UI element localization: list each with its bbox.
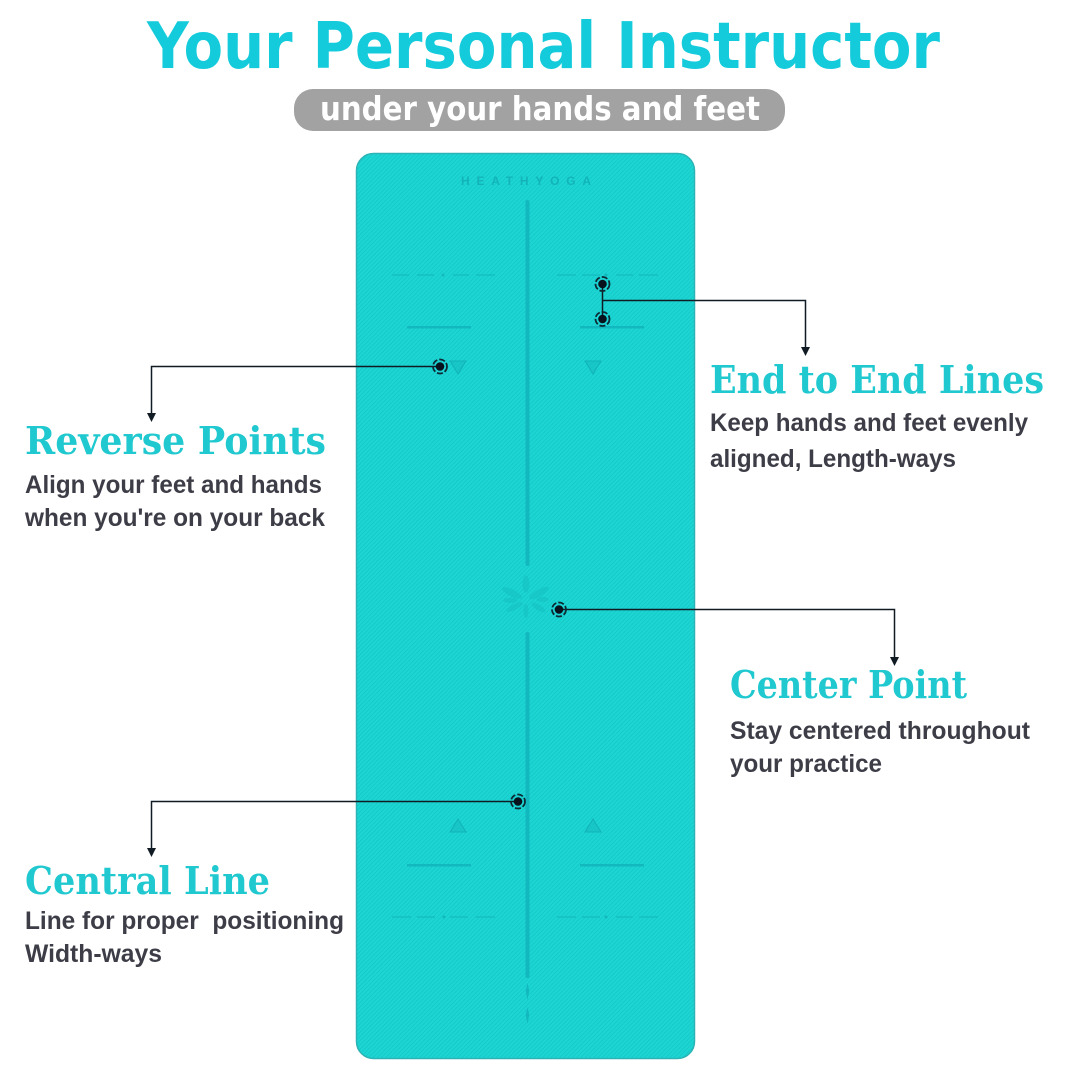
text block: reverse points	[24, 418, 326, 532]
text block: reverse points: Align your feet and hands	[25, 471, 322, 499]
text block: central line: Width-ways	[25, 940, 162, 968]
callout: center point connector	[552, 602, 899, 666]
text block: central line: Central Line	[25, 858, 270, 903]
text block: central line: Line for proper positioning	[25, 907, 344, 935]
text block: reverse points: when you're on your back	[24, 504, 325, 532]
reverse point triangles	[450, 361, 601, 832]
yoga mat	[356, 154, 694, 1058]
text block: end to end lines: Keep hands and feet evenly	[710, 409, 1028, 437]
brand name: HEATHYOGA	[461, 174, 591, 188]
central line	[526, 200, 530, 1024]
text block: end to end lines: aligned, Length-ways	[710, 445, 956, 473]
callout: central line connector	[147, 794, 525, 857]
subtitle pill: under your hands and feet	[320, 89, 760, 128]
text block: center point: your practice	[730, 750, 882, 778]
callout: reverse points connector	[147, 360, 447, 422]
end to end dashes	[392, 274, 658, 918]
text block: central line	[25, 858, 344, 968]
text block: end to end lines	[710, 357, 1044, 473]
alignment bars	[407, 326, 644, 866]
text block: center point: Center Point	[730, 662, 967, 707]
callout: end to end lines connector	[596, 277, 810, 356]
text block: center point: Stay centered throughout	[730, 717, 1031, 745]
center flower	[501, 576, 550, 618]
text block: reverse points: Reverse Points	[25, 418, 326, 463]
text block: center point	[730, 662, 1031, 778]
text block: end to end lines: End to End Lines	[710, 357, 1044, 402]
title: Your Personal Instructor	[146, 10, 940, 84]
